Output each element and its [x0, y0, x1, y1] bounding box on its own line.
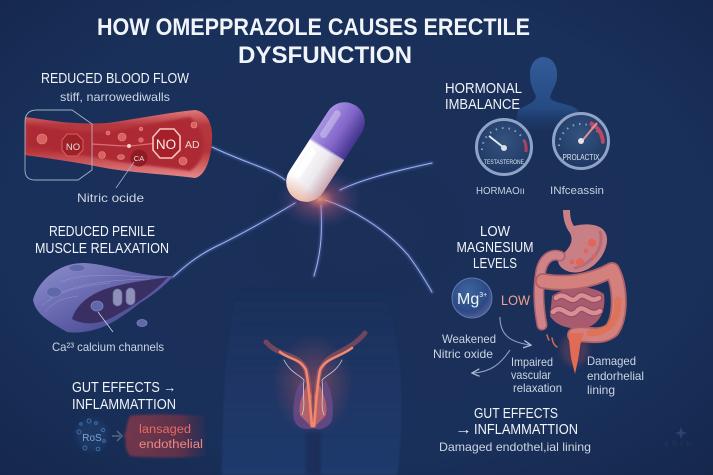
panel: low magnesium — [433, 224, 644, 397]
heading: penile muscle relaxation — [35, 224, 169, 257]
icon: NO octagon badge: NO — [156, 137, 176, 152]
oesophagus and stomach — [558, 210, 607, 272]
heading: gut effects inflammation: → — [455, 422, 472, 438]
heading: gut effects inflammation — [72, 380, 176, 413]
heading: hormonal imbalance: HORMONAL — [445, 81, 522, 97]
heading: low magnesium levels — [456, 224, 534, 272]
icon: NO badge small — [62, 134, 83, 156]
large intestine — [539, 255, 619, 335]
label: impaired vascular relaxation: vascular — [511, 368, 551, 382]
text: damaged endothelial lining: Damaged endothel,ial lining — [439, 440, 591, 454]
gauge: prolactin — [554, 114, 608, 168]
label: AD: AD — [185, 139, 200, 151]
genital anatomy illustration — [266, 333, 365, 435]
heading: penile muscle relaxation: REDUCED PENILE — [49, 224, 155, 240]
icon: ROS particles: RoS — [82, 433, 102, 444]
heading: hormonal imbalance: IMBALANCE — [445, 97, 520, 113]
small intestine — [550, 287, 604, 328]
label: damaged endothelial lining: Damaged — [587, 354, 636, 368]
central glow — [278, 169, 362, 229]
rectum — [568, 333, 584, 374]
watermark sparkle: ahlo — [664, 439, 692, 448]
muscle fibre illustration — [33, 263, 174, 333]
gauge caption: hormone: HORMAOıı — [476, 186, 525, 197]
capsule pill — [279, 95, 372, 209]
body silhouette — [222, 285, 402, 475]
label: damaged endothelial lining: lining — [587, 383, 615, 397]
title: DYSFUNCTION — [238, 42, 412, 69]
nerve lines radiating from capsule — [173, 147, 432, 292]
label: weakened nitric oxide: Weakened — [442, 332, 496, 346]
gauge: testosterone — [476, 120, 532, 174]
panel: gut effects left — [72, 380, 206, 458]
icon: vesicles — [46, 264, 147, 326]
icon: CA badge — [130, 150, 148, 166]
icon: red blood cells — [37, 122, 197, 165]
heading: gut effects inflammation — [455, 406, 578, 438]
icon: magnesium ion sphere — [452, 278, 492, 318]
label: low: LOW — [501, 292, 531, 308]
arrow to weakened nitric oxide — [473, 350, 510, 373]
label: impaired vascular relaxation — [511, 355, 562, 395]
panel: reduced penile muscle relaxation — [33, 224, 174, 354]
label: damaged endothelial lining — [587, 354, 644, 397]
icon: magnesium ion sphere: 3+ — [479, 292, 487, 299]
heading: low magnesium levels: LEVELS — [473, 256, 517, 272]
icon: magnesium ion sphere: Mg — [457, 291, 479, 308]
label: weakened nitric oxide — [433, 332, 496, 361]
panel: reduced blood flow — [25, 71, 212, 205]
damaged endothelial tissue: lansaged — [139, 424, 191, 436]
gauge: testosterone: TESTASTERONE — [484, 159, 525, 166]
arrow — [112, 431, 122, 441]
icon: NO badge small: NO — [66, 142, 80, 153]
watermark sparkle — [664, 427, 692, 448]
label: weakened nitric oxide: Nitric oxide — [433, 347, 493, 361]
panel: hormonal imbalance — [445, 57, 608, 197]
label: impaired vascular relaxation: relaxation — [513, 381, 562, 395]
title: HOW OMEPPRAZOLE CAUSES ERECTILE — [97, 14, 530, 41]
heading: penile muscle relaxation: MUSCLE RELAXATION — [35, 241, 169, 257]
label: impaired vascular relaxation: Impaired — [511, 355, 553, 369]
callout outline box — [25, 110, 92, 180]
heading: low magnesium levels: LOW — [480, 224, 510, 240]
heading: gut effects inflammation: GUT EFFECTS — [474, 406, 558, 422]
icon: NO octagon badge — [153, 129, 180, 158]
leader line — [116, 162, 134, 188]
title — [97, 14, 530, 69]
gauge caption: increasing: INfceassin — [550, 185, 604, 197]
label: nitric oxide: Nitric ocide — [77, 191, 144, 205]
label: damaged endothelial lining: endorhelial — [587, 369, 644, 383]
heading: hormonal imbalance — [445, 81, 522, 113]
icon: calcium channels — [113, 288, 135, 306]
panel: gut effects right — [439, 406, 591, 454]
heading: low magnesium levels: MAGNESIUM — [456, 240, 534, 256]
label: calcium channels: Ca²³ calcium channels — [52, 340, 164, 354]
icon: CA badge: CA — [134, 154, 144, 163]
arrow to impaired relaxation — [500, 317, 530, 345]
heading: gut effects inflammation: INFLAMMATTION — [72, 397, 176, 413]
icon: stomach and intestines — [539, 210, 619, 374]
heading: gut effects inflammation: INFLAMMATTION — [474, 422, 578, 438]
damaged endothelial tissue — [124, 414, 206, 458]
damaged endothelial tissue: endothelial — [139, 439, 203, 451]
artery vessel illustration — [25, 110, 212, 178]
leader line — [98, 312, 113, 332]
icon: head and shoulders silhouette — [515, 57, 592, 130]
heading: reduced blood flow: REDUCED BLOOD FLOW — [41, 71, 189, 87]
heading: gut effects inflammation: GUT EFFECTS → — [72, 380, 176, 396]
subtitle: stiff walls: stiff, narrowediwalls — [60, 90, 170, 104]
gauge: prolactin: PROLACTIX — [562, 153, 600, 162]
